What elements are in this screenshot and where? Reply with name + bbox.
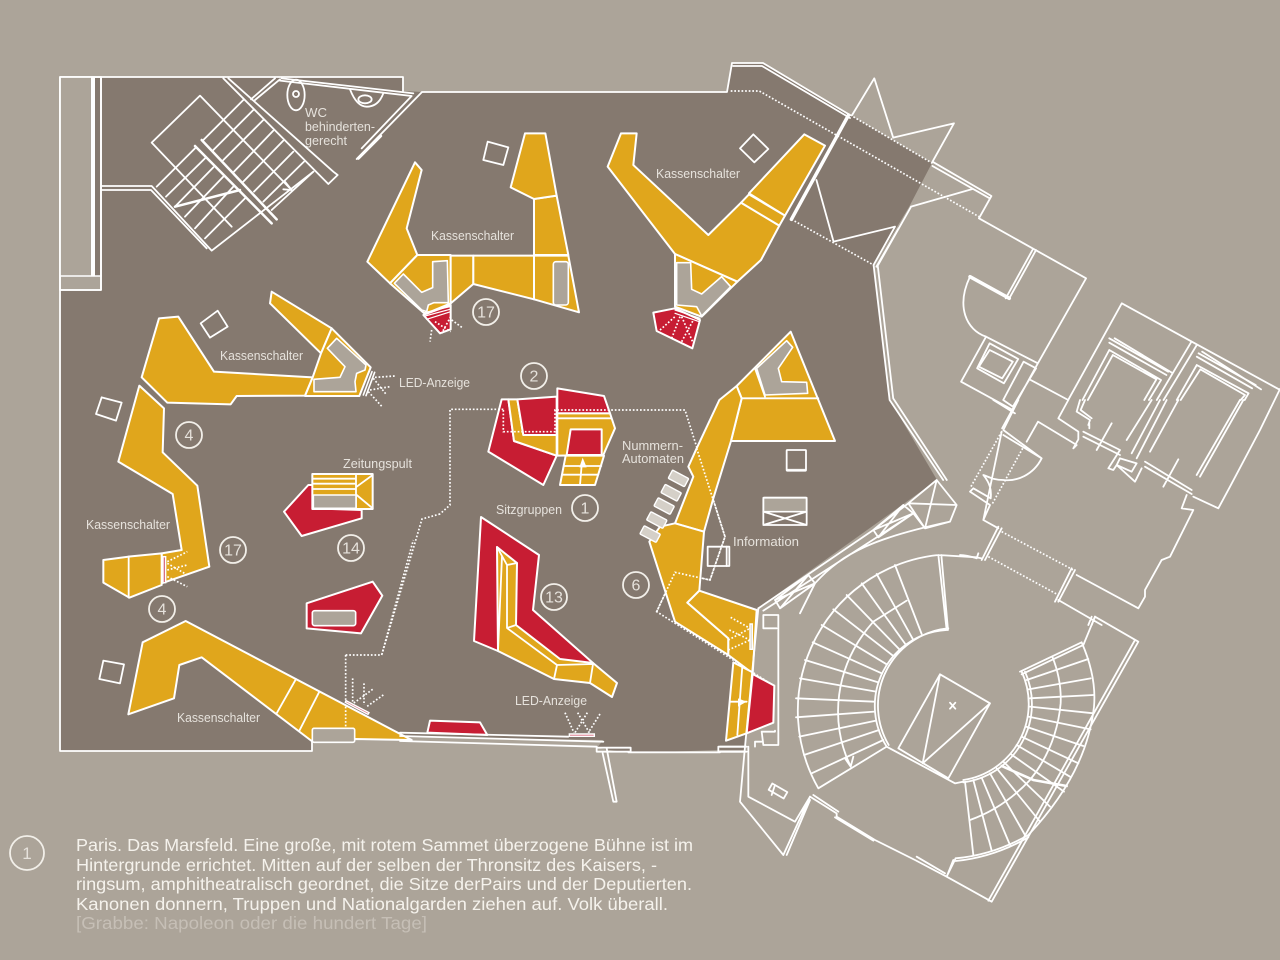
quotation text block: Kanonen donnern, Truppen und Nationalgarden ziehen auf. Volk überall. xyxy=(76,894,668,914)
label: Nummern: Nummern- xyxy=(622,438,683,453)
label: Kassenschalter: Kassenschalter xyxy=(656,166,741,181)
number badges: 4 xyxy=(158,602,167,618)
quotation text block xyxy=(76,835,693,933)
building: lift rooms xyxy=(1082,338,1261,400)
panel: left ticket counter xyxy=(142,292,395,407)
number badges: 4 xyxy=(185,428,194,444)
quotation text block: Paris. Das Marsfeld. Eine große, mit rotem Sammet überzogene Bühne ist im xyxy=(76,835,693,855)
quotation text block: ringsum, amphitheatralisch geordnet, die Sitze derPairs und der Deputierten. xyxy=(76,874,692,894)
label: Kassenschalter: Kassenschalter xyxy=(431,228,515,243)
number badges: 14 xyxy=(342,540,360,558)
WC rooms xyxy=(251,78,422,159)
number badges: 6 xyxy=(632,578,641,594)
quotation text block: Hintergrunde errichtet. Mitten auf der selben der Thronsitz des Kaisers, - xyxy=(76,855,657,875)
quotation text block: [Grabbe: Napoleon oder die hundert Tage] xyxy=(76,913,427,933)
panel: seating groups xyxy=(440,388,770,683)
number badges xyxy=(149,299,649,622)
number badges: 2 xyxy=(530,368,539,386)
label: LED-Anzeige: LED-Anzeige xyxy=(399,375,470,390)
panel: lower left ticket counter xyxy=(99,540,413,742)
dotted route to the left xyxy=(382,514,440,654)
label: WC: WC xyxy=(305,105,327,120)
label: Kassenschalter: Kassenschalter xyxy=(177,710,261,725)
panel: newspaper desk xyxy=(284,474,373,536)
floor plan: main hall floor xyxy=(60,63,937,753)
panel: right ticket counter xyxy=(640,332,835,673)
building: rotunda staircase xyxy=(720,480,1138,902)
staircase top left xyxy=(102,78,338,251)
label: Automaten: Automaten xyxy=(622,451,684,466)
number badges: 13 xyxy=(545,590,563,606)
number badges: 1 xyxy=(581,500,590,518)
information desks xyxy=(708,450,807,566)
number badges: 17 xyxy=(224,542,242,560)
number badges: 17 xyxy=(477,304,495,322)
label: Kassenschalter: Kassenschalter xyxy=(220,348,304,363)
panel: stage counter 13 xyxy=(474,517,617,697)
panel: counter at entrance with stage xyxy=(726,617,774,741)
panel: upper centre ticket counter xyxy=(367,133,579,342)
footnote number badge: 1 xyxy=(22,844,32,863)
footnote number badge xyxy=(10,836,44,870)
label: Information: Information xyxy=(733,534,799,549)
label: Sitzgruppen: Sitzgruppen xyxy=(496,502,562,517)
building: north east wing xyxy=(731,78,1279,480)
outer walls xyxy=(60,63,850,751)
label: Zeitungspult: Zeitungspult xyxy=(343,456,412,471)
building: rear rooms and doors xyxy=(960,389,1280,625)
panel: upper right ticket counter xyxy=(608,133,825,348)
label: gerecht: gerecht xyxy=(305,133,347,148)
panel: far left ticket counter xyxy=(96,386,209,598)
label: LED-Anzeige: LED-Anzeige xyxy=(515,693,587,708)
panel: front facade and exit xyxy=(400,713,745,802)
label: Kassenschalter: Kassenschalter xyxy=(86,517,171,532)
label: behinderten: behinderten- xyxy=(305,119,375,134)
